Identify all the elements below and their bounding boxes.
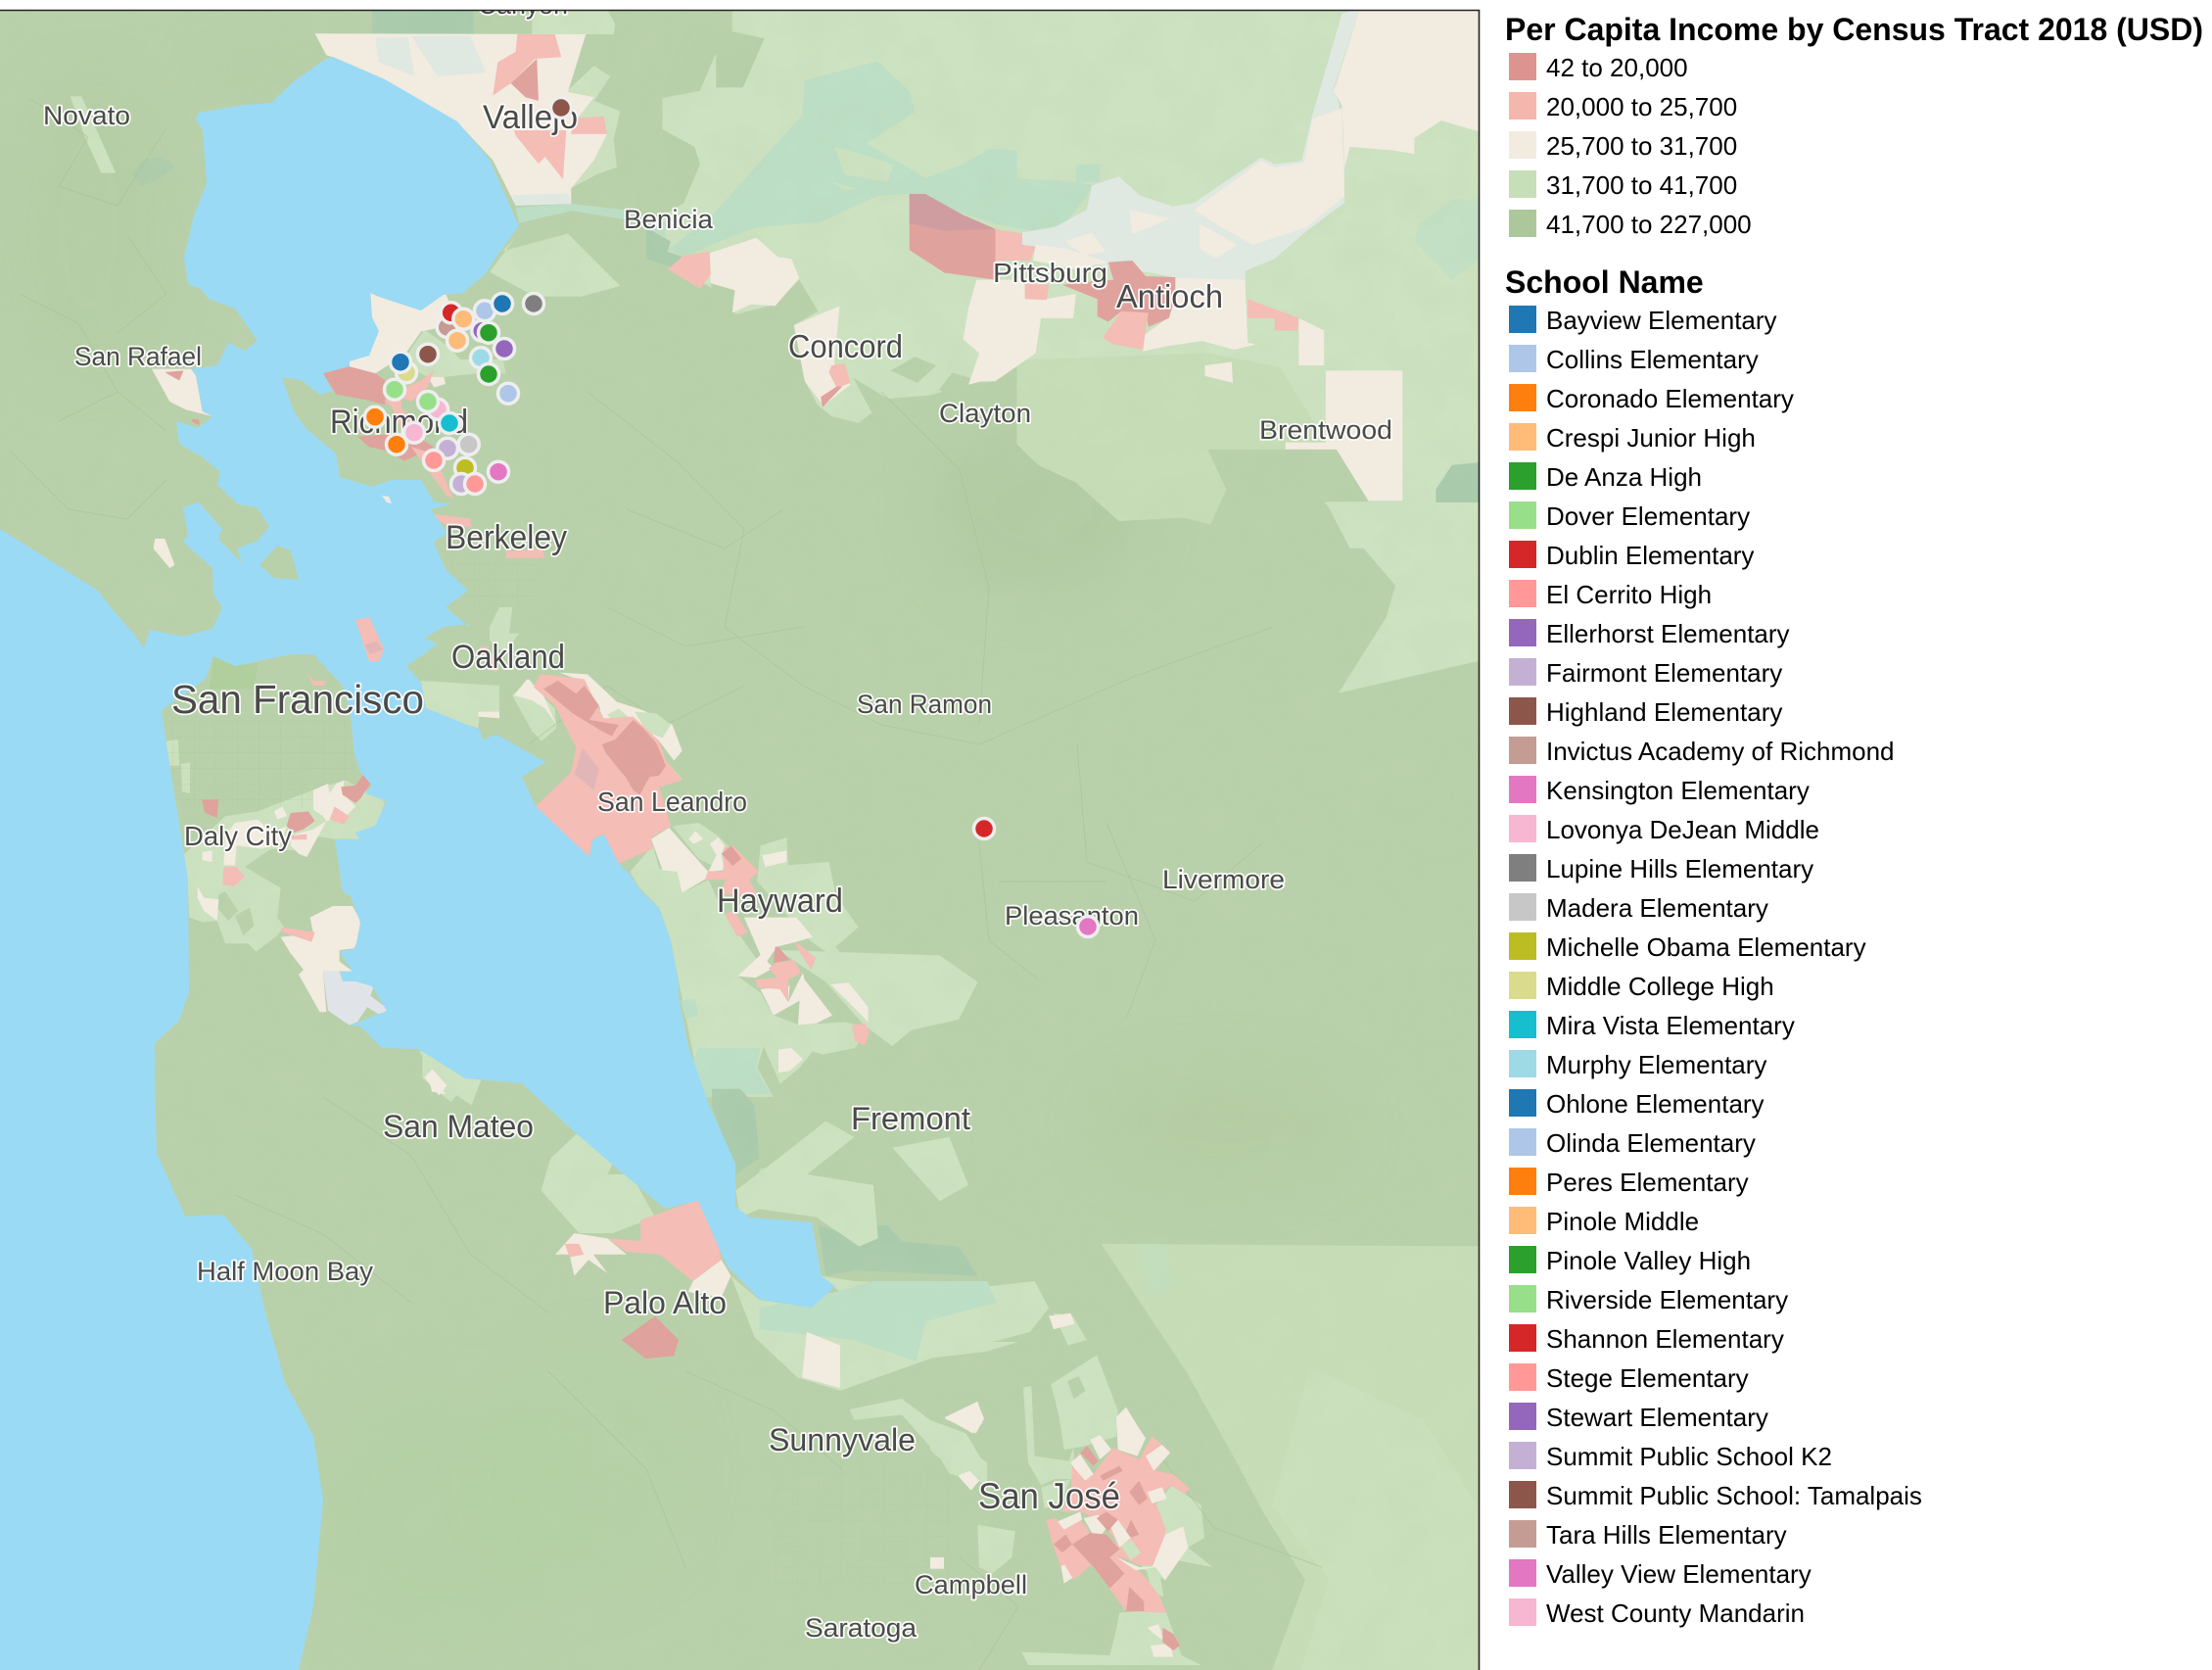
city label: Vallejo: Vallejo [483,99,578,136]
water: ocean and San Francisco Bay [0,57,835,1670]
city label: Campbell: Campbell [915,1570,1027,1599]
legend item: 25,700 to 31,700: 25,700 to 31,700 [1546,131,1737,161]
cream pink red tracts: San Francisco and peninsula north [198,646,539,1095]
city label: Saratoga: Saratoga [805,1613,918,1643]
city label: San Leandro: San Leandro [597,787,747,817]
city label: San Mateo: San Mateo [383,1109,534,1144]
light green tracts: Marin [71,96,176,186]
terrain shading [10,29,1351,1646]
legend title: income: Per Capita Income by Census Tract 2018 (USD) [1505,12,2203,47]
city label: Clayton: Clayton [939,399,1031,428]
legend item: Tara Hills Elementary: Tara Hills Elementary [1546,1520,1787,1550]
legend item: Michelle Obama Elementary: Michelle Obama Elementary [1546,932,1866,962]
marker: El Cerrito High [423,451,445,470]
city label: Richmond: Richmond [330,404,468,441]
city label: Hayward: Hayward [717,883,843,920]
legend item: Pinole Valley High: Pinole Valley High [1546,1246,1751,1275]
marker: De Anza High [478,322,499,343]
terrain texture [0,0,1479,1670]
land base [0,0,1479,1670]
legend item: Ellerhorst Elementary: Ellerhorst Elementary [1546,619,1790,648]
island: Angel Island [259,546,299,580]
marker: West County Mandarin [403,422,425,443]
marker: Lupine Hills Elementary [523,294,544,313]
pink and red tracts: Vallejo, Richmond, Berkeley [323,34,607,558]
light green tracts: East Bay plain [631,766,859,1097]
legend item: Peres Elementary: Peres Elementary [1546,1168,1749,1197]
legend item: El Cerrito High: El Cerrito High [1546,580,1712,609]
light green tracts: north and east county [646,7,1489,549]
marker: Crespi Junior High [453,309,474,329]
legend item: Middle College High: Middle College High [1546,972,1774,1001]
city label: Sunnyvale: Sunnyvale [769,1422,916,1457]
city label: Benicia: Benicia [624,205,714,234]
island: Tiburon tip marker [191,419,200,425]
marker: Murphy Elementary [470,348,492,368]
legend item: Dover Elementary: Dover Elementary [1546,501,1750,531]
marker: Riverside Elementary [417,392,439,411]
city label: Pleasanton: Pleasanton [1005,901,1139,930]
island: Brooks islet [382,496,392,503]
legend title: schools: School Name [1505,264,1704,300]
marker: Middle College High [396,362,417,383]
legend item: 42 to 20,000: 42 to 20,000 [1546,53,1688,82]
marker: Dover Elementary [384,379,405,400]
school markers [364,98,1099,936]
legend item: Coronado Elementary: Coronado Elementary [1546,384,1794,413]
pink and red tracts: east county [668,194,1298,407]
marker: Fairmont Elementary [437,438,458,458]
city label: San Rafael: San Rafael [74,342,202,371]
cream tracts: Vallejo and Richmond [315,33,607,388]
marker: Kensington Elementary [488,461,509,482]
legend item: Madera Elementary: Madera Elementary [1546,893,1768,923]
legend item: Fairmont Elementary: Fairmont Elementary [1546,658,1782,688]
marker: Pinole Middle [447,330,468,351]
city label: San Ramon: San Ramon [857,690,992,719]
light green tracts: San Jose [930,1342,1212,1665]
city label: Palo Alto: Palo Alto [603,1285,727,1320]
marker: Bayview Elementary [390,352,411,372]
legend item: Kensington Elementary: Kensington Elementary [1546,776,1810,805]
marker: Lovonya DeJean Middle [427,399,448,419]
legend item: 31,700 to 41,700: 31,700 to 41,700 [1546,170,1737,200]
tract boundaries [10,98,1322,1670]
marker: Michelle Obama Elementary [454,457,476,478]
cream tracts: east county [708,7,1489,501]
legend: schools [1505,264,1922,1628]
legend item: 20,000 to 25,700: 20,000 to 25,700 [1546,92,1737,121]
cream pink red tracts: San Jose [930,1403,1190,1657]
legend item: Highland Elementary: Highland Elementary [1546,697,1782,727]
marker: Stewart Elementary [472,320,493,341]
marker: Collins Elementary [474,301,495,321]
city label: Novato: Novato [43,101,130,130]
marker: Summit Public School Tamalpais [550,98,572,118]
marker: Dublin Elementary [973,819,995,838]
marker: Tara Hills Elementary [437,317,457,337]
legend item: Stewart Elementary: Stewart Elementary [1546,1403,1768,1432]
legend item: 41,700 to 227,000: 41,700 to 227,000 [1546,210,1752,239]
legend item: Ohlone Elementary: Ohlone Elementary [1546,1089,1765,1119]
legend item: Pinole Middle: Pinole Middle [1546,1207,1699,1236]
marker: Coronado Elementary [364,406,386,427]
city label: San Jose: San José [978,1476,1120,1516]
marker: Madera Elementary [458,434,479,454]
marker: Stege Elementary [464,474,486,494]
marker: Shannon Elementary [441,303,461,323]
Suisun Bay marsh [668,61,1092,257]
city label: Pittsburg: Pittsburg [993,258,1107,288]
legend item: Olinda Elementary: Olinda Elementary [1546,1128,1756,1158]
legend item: Riverside Elementary: Riverside Elementary [1546,1285,1788,1314]
marker: Olinda Elementary [497,383,519,404]
legend item: Crespi Junior High: Crespi Junior High [1546,423,1756,453]
city label: Daly City: Daly City [184,821,292,851]
city label: San Francisco: San Francisco [171,677,424,722]
legend item: West County Mandarin: West County Mandarin [1546,1598,1805,1628]
legend item: Lupine Hills Elementary: Lupine Hills Elementary [1546,854,1813,883]
legend item: Bayview Elementary: Bayview Elementary [1546,306,1777,335]
legend item: Dublin Elementary: Dublin Elementary [1546,541,1754,570]
city label: Half Moon Bay: Half Moon Bay [197,1257,373,1286]
city label: Fremont: Fremont [851,1101,970,1136]
legend item: Murphy Elementary: Murphy Elementary [1546,1050,1766,1079]
marker: Peres Elementary [386,434,407,454]
legend item: De Anza High: De Anza High [1546,462,1702,492]
marker: Valley View Elementary [1077,917,1099,936]
legend: income [1505,12,2203,239]
legend item: Lovonya DeJean Middle: Lovonya DeJean Middle [1546,815,1819,844]
city label: Oakland: Oakland [451,639,565,676]
marker: Summit Public School K2 [450,474,472,494]
legend item: Stege Elementary: Stege Elementary [1546,1363,1749,1393]
marker: Mira Vista Elementary [439,413,460,433]
cream pink red tracts: Oakland to Hayward [514,673,870,1073]
light green tracts: Vallejo and Hercules hills [372,10,666,377]
city label: Antioch: Antioch [1116,278,1223,314]
marker: Ellerhorst Elementary [494,339,515,358]
marker: Pinole Valley High [478,364,499,384]
city label: Concord: Concord [788,328,903,364]
marker: Highland Elementary [417,344,439,364]
legend item: Mira Vista Elementary: Mira Vista Elementary [1546,1011,1795,1040]
cream pink red tracts: Palo Alto [427,1073,1074,1433]
island: Treasure Island [355,617,384,661]
legend item: Summit Public School: Tamalpais: Summit Public School: Tamalpais [1546,1481,1922,1510]
legend item: Collins Elementary: Collins Elementary [1546,345,1759,374]
city label: Brentwood: Brentwood [1259,415,1392,445]
legend item: Valley View Elementary: Valley View Elementary [1546,1559,1812,1589]
legend item: Summit Public School K2: Summit Public School K2 [1546,1442,1832,1471]
cream and red tracts: San Rafael and Marin [152,369,212,568]
map frame [0,10,1479,1670]
light green tracts: South Bay and Santa Cruz hills [422,950,1490,1670]
city label: Livermore: Livermore [1162,865,1285,894]
panel: map [0,0,1490,1670]
marker: Ohlone Elementary [492,294,513,313]
legend item: Shannon Elementary: Shannon Elementary [1546,1324,1784,1354]
light green tracts: San Francisco and peninsula north [166,607,556,1105]
city label: Berkeley: Berkeley [446,519,567,556]
legend item: Invictus Academy of Richmond: Invictus Academy of Richmond [1546,737,1894,766]
